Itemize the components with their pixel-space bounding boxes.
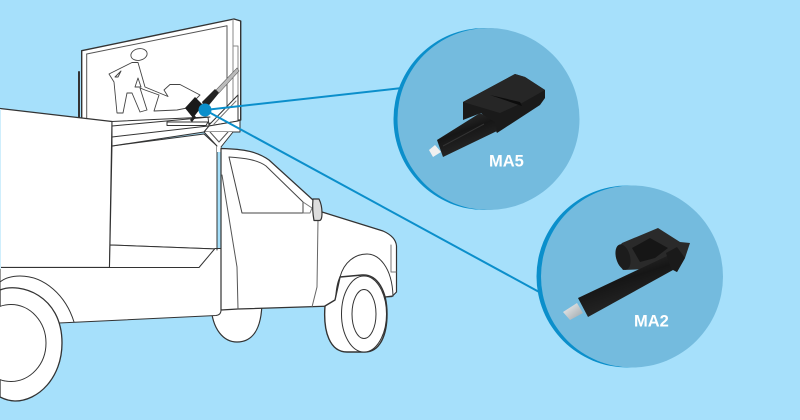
connector line to MA5	[205, 88, 402, 110]
callout: MA5	[394, 28, 580, 210]
side mirror	[313, 199, 322, 221]
rear fender arc	[0, 276, 74, 322]
blue pivot dot	[198, 104, 212, 116]
cab pillar	[217, 146, 221, 250]
truck illustration	[0, 19, 396, 401]
front wheel	[325, 275, 387, 352]
cab rear wheel	[211, 300, 262, 342]
wheel arch	[335, 254, 393, 303]
label MA5: MA5	[489, 152, 524, 170]
connector line to MA2	[205, 110, 541, 293]
callout: MA2	[536, 186, 723, 368]
sign board	[79, 19, 241, 124]
cab	[221, 148, 396, 310]
truck body	[0, 108, 221, 323]
actuator MA5	[429, 74, 545, 157]
cab window	[229, 157, 303, 213]
label MA2: MA2	[634, 312, 669, 330]
platform and bracket	[112, 95, 240, 152]
actuator on sign	[185, 68, 239, 122]
actuator MA2	[563, 228, 690, 320]
box edge highlight	[0, 109, 1, 269]
rear wheel	[0, 288, 62, 401]
sign pictogram: worker with shovel	[109, 47, 200, 113]
